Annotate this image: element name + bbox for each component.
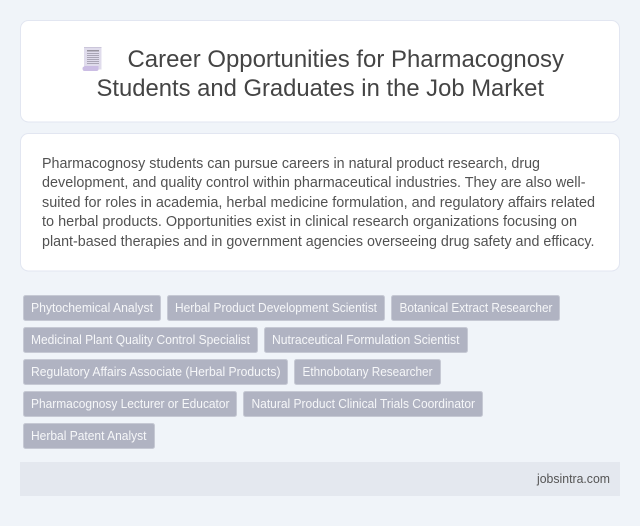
title: Students and Graduates in the Job Market [96, 75, 544, 102]
tag: Regulatory Affairs Associate (Herbal Products): Regulatory Affairs Associate (Herbal Products) [31, 365, 280, 379]
text block: description: suited for roles in academia, herbal medicine formulation, and regulatory affairs related [42, 194, 595, 211]
title: Career Opportunities for Pharmacognosy [128, 46, 565, 73]
text block: description: development, and quality control within pharmaceutical industries. They are also well- [42, 174, 586, 191]
footer bar [20, 462, 620, 496]
tag: Botanical Extract Researcher: Botanical Extract Researcher [400, 301, 552, 315]
tag: Herbal Product Development Scientist [168, 296, 384, 320]
tag list: job titles [24, 296, 560, 448]
tag: Medicinal Plant Quality Control Specialist: Medicinal Plant Quality Control Specialist [31, 333, 250, 347]
tag: Herbal Patent Analyst [24, 424, 154, 448]
tag: Pharmacognosy Lecturer or Educator [24, 392, 236, 416]
title [96, 46, 565, 102]
tag: Natural Product Clinical Trials Coordinator [244, 392, 482, 416]
footer text: source site: jobsintra.com [536, 472, 610, 486]
tag: Pharmacognosy Lecturer or Educator: Pharmacognosy Lecturer or Educator [31, 397, 230, 411]
tag: Medicinal Plant Quality Control Specialist [24, 328, 258, 352]
tag: Phytochemical Analyst: Phytochemical Analyst [31, 301, 154, 315]
tag: Phytochemical Analyst [24, 296, 160, 320]
tag: Nutraceutical Formulation Scientist [264, 328, 468, 352]
tag: Ethnobotany Researcher: Ethnobotany Researcher [302, 365, 432, 379]
tag: Ethnobotany Researcher [294, 360, 440, 384]
tag: Herbal Patent Analyst: Herbal Patent Analyst [31, 429, 147, 443]
tag: Herbal Product Development Scientist: Herbal Product Development Scientist [175, 301, 377, 315]
text block: description: plant-based therapies and in government agencies overseeing drug safety and efficacy. [42, 233, 594, 250]
panel: title header [20, 20, 620, 122]
tag: Botanical Extract Researcher [392, 296, 560, 320]
panel: description [20, 134, 620, 271]
text block: description: to herbal products. Opportunities exist in clinical research organizations focusing on [42, 213, 577, 230]
icon: paper scroll [82, 47, 102, 71]
tag: Regulatory Affairs Associate (Herbal Products) [24, 360, 288, 384]
text block: description: Pharmacognosy students can pursue careers in natural product research, drug [42, 155, 540, 172]
tag: Nutraceutical Formulation Scientist: Nutraceutical Formulation Scientist [272, 333, 460, 347]
text block: description [42, 155, 595, 250]
tag: Natural Product Clinical Trials Coordinator: Natural Product Clinical Trials Coordinator [252, 397, 475, 411]
